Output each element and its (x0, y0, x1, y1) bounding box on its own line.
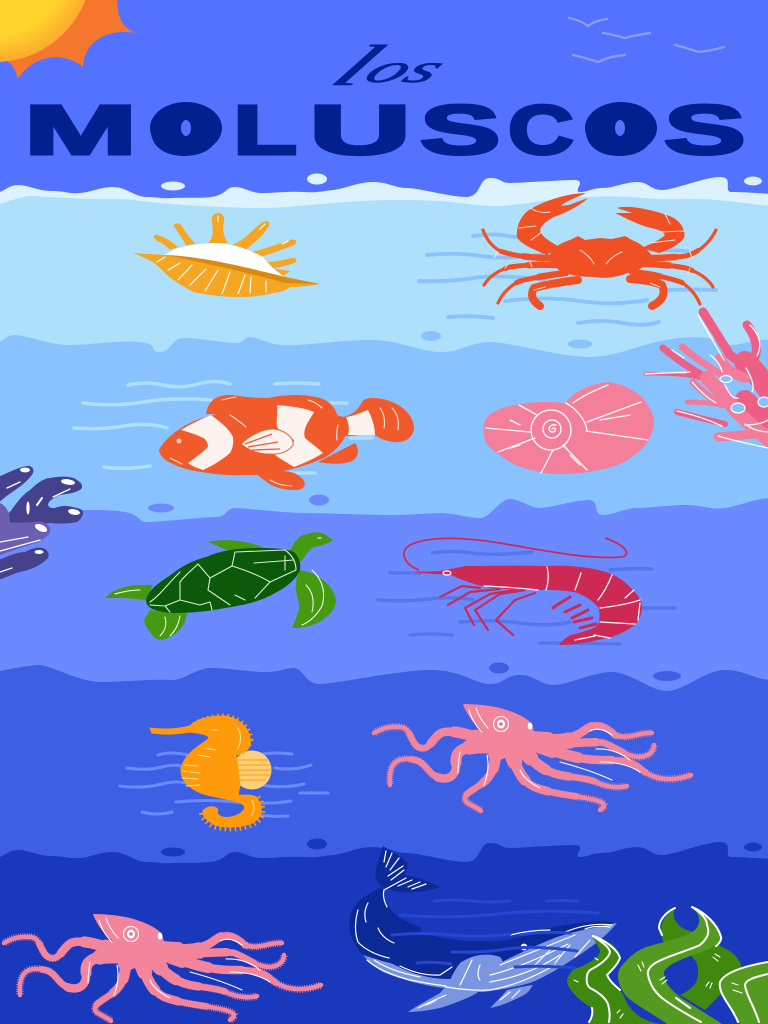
ripples near seahorse (120, 753, 328, 816)
title: MOLUSCOS: O (149, 91, 220, 169)
subtitle: los: l (317, 33, 399, 98)
bubbles layer 3 (148, 494, 329, 512)
bubbles layer 2 (421, 331, 592, 348)
octopus: upper (374, 704, 691, 811)
ripples near whale (400, 900, 598, 917)
water layer 4 (0, 665, 768, 1024)
subtitle: los: os (354, 47, 458, 91)
water layer 5 (0, 842, 768, 1024)
foam bubbles (161, 174, 762, 190)
coral holes: pink (720, 376, 768, 413)
ripples near fish (74, 382, 372, 473)
ripples near crab (419, 234, 716, 325)
title: MOLUSCOS: O (584, 91, 655, 169)
title: MOLUSCOS (24, 91, 746, 169)
water layer 3 (0, 498, 768, 1024)
title: MOLUSCOS: L (233, 91, 297, 169)
title letter O fills (150, 102, 657, 154)
water layer 2 (0, 335, 768, 1024)
title: MOLUSCOS: U (309, 91, 411, 169)
bubbles layer 4 (489, 662, 681, 681)
seahorse (150, 716, 272, 829)
sea turtle (105, 532, 336, 640)
coral highlights: pink (645, 315, 768, 448)
nautilus shell (484, 382, 654, 474)
sun (0, 0, 136, 79)
conch shell (133, 213, 320, 297)
bubbles layer 5 (161, 838, 762, 856)
coral: pink (645, 312, 768, 445)
crab (483, 193, 716, 306)
title: MOLUSCOS: M (24, 91, 137, 169)
title: MOLUSCOS: C (508, 91, 574, 169)
title: MOLUSCOS: S (420, 91, 500, 169)
birds (569, 18, 724, 62)
shrimp (404, 538, 642, 645)
title: MOLUSCOS: S (664, 91, 746, 169)
coral: purple (0, 466, 83, 580)
clownfish (159, 395, 414, 490)
whale (349, 846, 617, 1012)
ripples near turtle and shrimp (378, 552, 675, 644)
seaweed (567, 907, 768, 1024)
octopus: lower (4, 914, 321, 1021)
